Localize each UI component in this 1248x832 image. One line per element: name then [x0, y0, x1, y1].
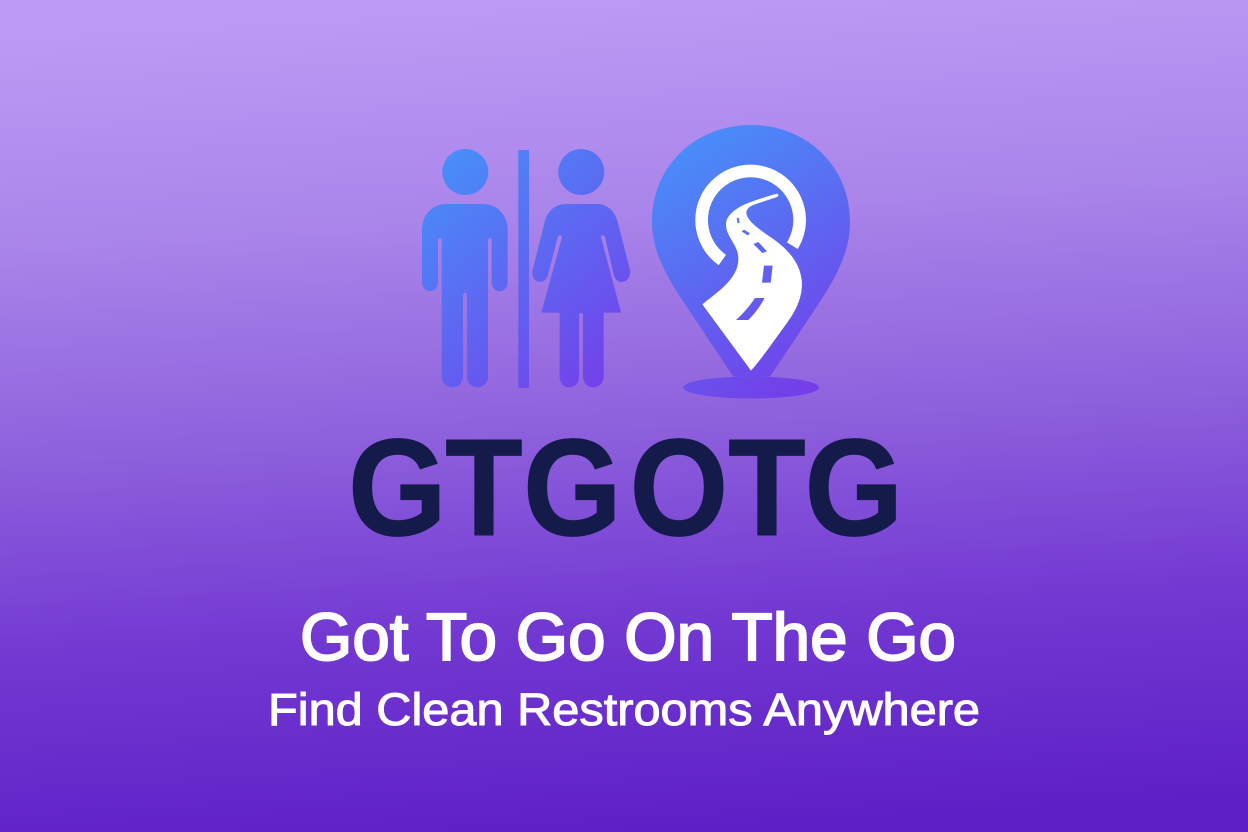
icon: man [422, 149, 508, 387]
pin body [652, 125, 850, 377]
title: GTGOTG: GTGOTG [348, 411, 903, 565]
tagline: Got To Go On The Go [300, 600, 956, 675]
icon: restroom figures [422, 149, 630, 388]
road centre dashes [736, 218, 773, 320]
icon: woman [532, 149, 630, 387]
ring around road [702, 171, 800, 260]
pin shadow base [683, 376, 819, 398]
winding road [702, 194, 802, 371]
icon: location pin with winding road [652, 125, 850, 398]
subtitle: Find Clean Restrooms Anywhere [268, 684, 980, 735]
divider pole [518, 150, 529, 388]
